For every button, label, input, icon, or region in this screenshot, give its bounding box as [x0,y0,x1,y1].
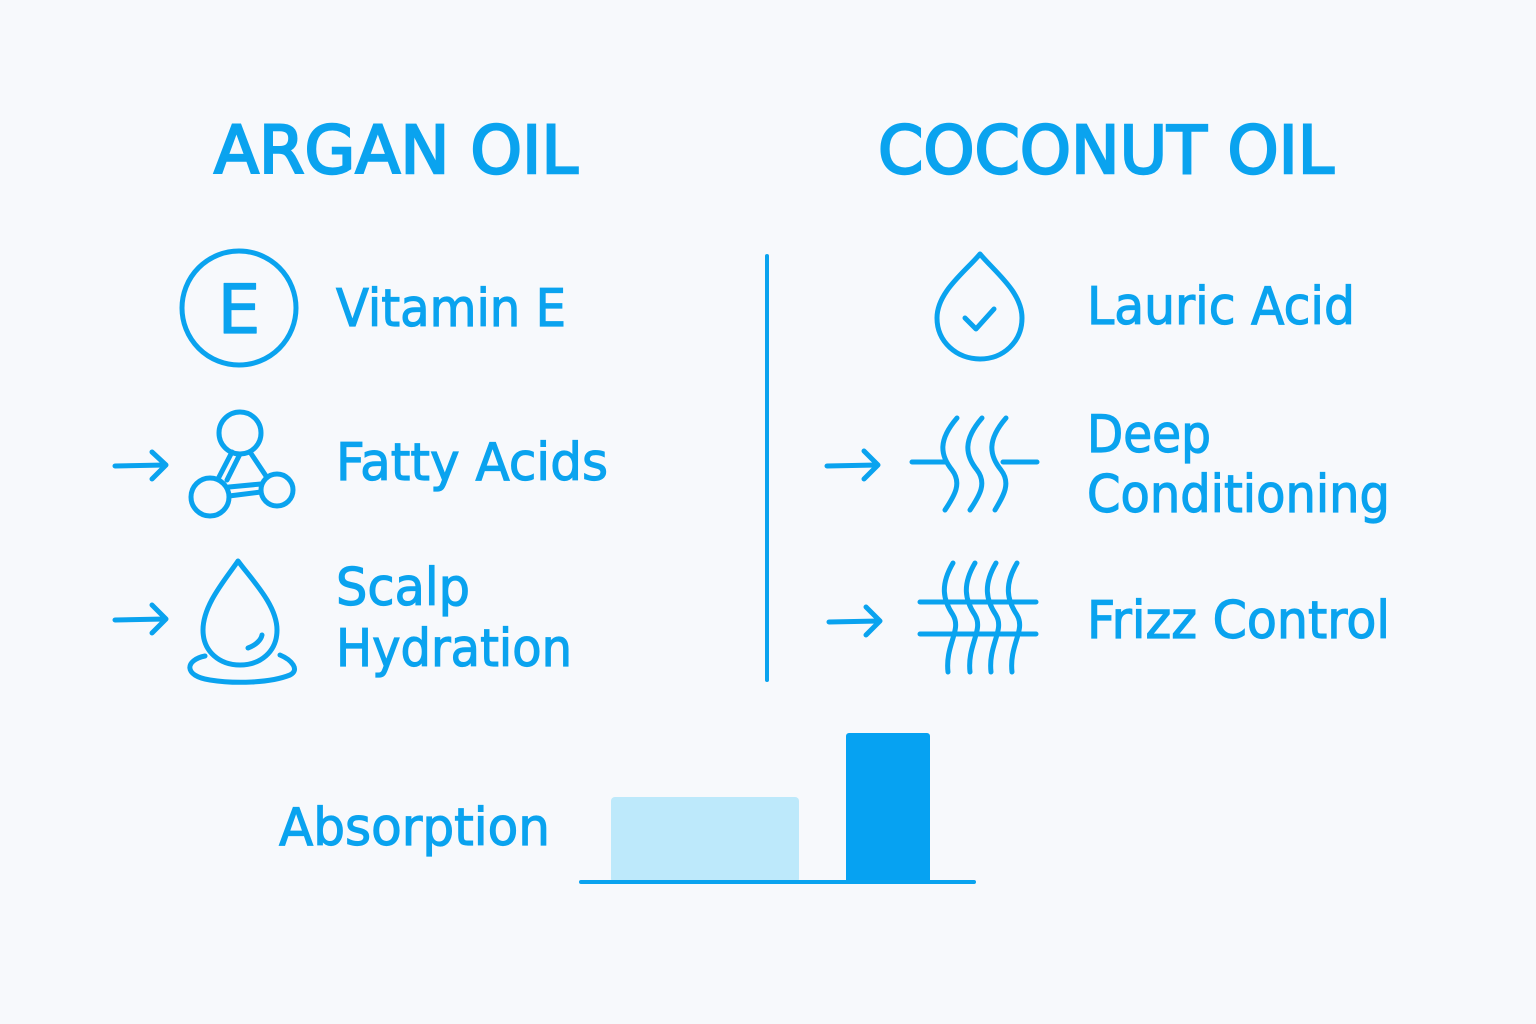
icon: vitamin E [182,251,296,365]
text: frizz control: Frizz Control [1087,591,1390,651]
arrow: fatty acids [115,452,166,479]
icon: frizz [920,563,1036,672]
text: deep conditioning [1087,405,1390,525]
text: deep conditioning: Deep [1087,405,1211,465]
title: coconut oil: COCONUT OIL [878,112,1334,189]
arrow: frizz control [829,607,880,635]
arrow: scalp hydration [115,605,166,633]
title: argan oil: ARGAN OIL [214,112,578,189]
bar: argan [611,797,799,883]
chart: absorption [279,733,974,883]
text: scalp hydration [336,558,572,679]
text: deep conditioning: Conditioning [1087,465,1390,525]
icon: drop with check [937,254,1022,359]
text: vitamin E: Vitamin E [336,279,566,339]
icon: drop with ripple [190,561,295,682]
panel: coconut oil [827,254,1037,672]
icon: hair strands [912,418,1037,510]
label: absorption: Absorption [279,798,550,858]
text: fatty acids: Fatty Acids [336,433,608,493]
divider [765,256,769,680]
arrow: deep conditioning [827,451,878,479]
panel: argan oil [115,251,296,682]
text: scalp hydration: Scalp [336,558,470,618]
text: lauric acid: Lauric Acid [1087,277,1355,337]
icon: molecule [191,412,293,516]
text: scalp hydration: Hydration [336,619,572,679]
icon: vitamin E: E [218,271,260,350]
bar: coconut [846,733,930,883]
